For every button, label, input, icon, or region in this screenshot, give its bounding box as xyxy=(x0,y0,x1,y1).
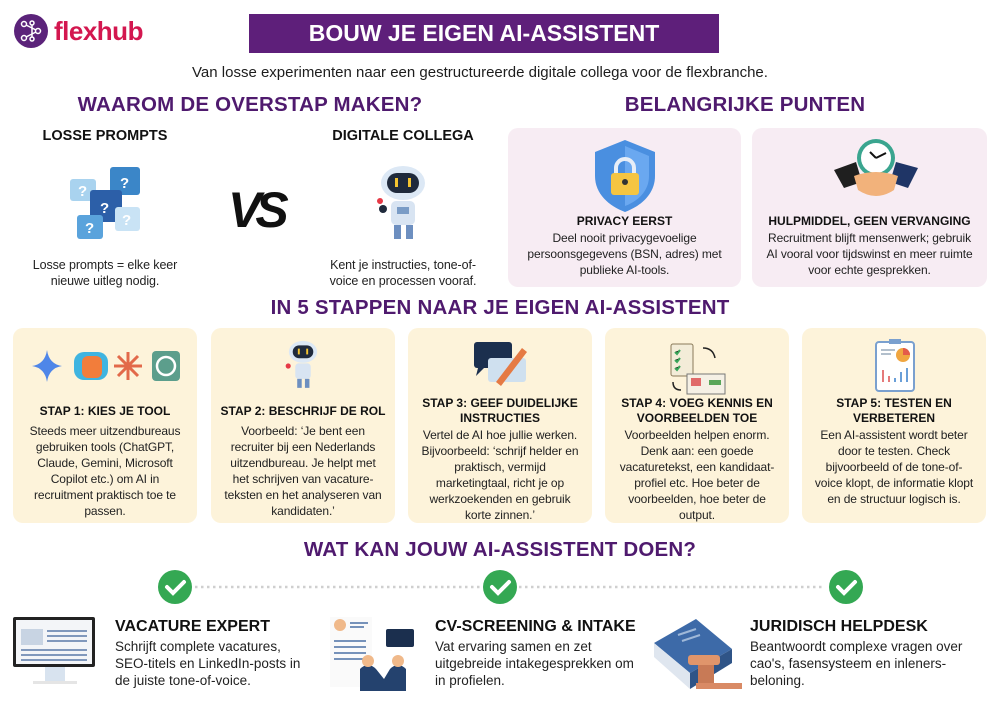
heading: 5 stappen: IN 5 STAPPEN NAAR JE EIGEN AI-ASSISTENT xyxy=(271,296,729,319)
item: juridisch helpdesk: JURIDISCH HELPDESK xyxy=(750,618,928,635)
panel: stap 2: STAP 2: BESCHRIJF DE ROL xyxy=(221,404,385,418)
panel: stap 3: Vertel de AI hoe jullie werken. Bijvoorbeeld: ‘schrijf helder en praktisch, vermijd marketingtaal, richt je op werkzoekenden en gebruik korte zinnen.’ xyxy=(422,428,578,522)
panel: stap 1: Steeds meer uitzendbureaus gebruiken tools (ChatGPT, Claude, Gemini, Microsoft Copilot etc.) om AI in recruitment praktisch toe te passen. xyxy=(30,424,180,518)
icon: question bubbles: ? xyxy=(78,183,87,200)
panel: hulpmiddel xyxy=(752,128,987,287)
panel: stap 2: Voorbeeld: ‘Je bent een recruiter bij een Nederlands uitzendbureau. Je helpt met het schrijven van vacature-teksten en het analyseren van kandidaten.’ xyxy=(224,424,382,518)
icon: robot xyxy=(286,341,318,388)
panel: stap 4 xyxy=(605,328,789,523)
panel: digitale collega: Kent je instructies, tone-of-voice en processen vooraf. xyxy=(330,258,476,288)
panel: stap 4: Voorbeelden helpen enorm. Denk aan: een goede vacaturetekst, een kandidaat-profiel etc. Hoe beter de voorbeelden, hoe beter de output. xyxy=(620,428,774,522)
subtitle: Van losse experimenten naar een gestructureerde digitale collega voor de flexbranche. xyxy=(192,64,768,81)
panel: hulpmiddel: HULPMIDDEL, GEEN VERVANGING xyxy=(768,214,971,228)
item: cv-screening xyxy=(334,618,636,691)
panel: digitale collega xyxy=(330,128,476,288)
item: vacature expert: Schrijft complete vacatures, SEO-titels en LinkedIn-posts in de juiste tone-of-voice. xyxy=(115,639,300,688)
icon: question bubbles: ? xyxy=(100,200,109,217)
item: cv-screening: Vat ervaring samen en zet uitgebreide intakegesprekken om in profielen. xyxy=(435,639,634,688)
icon: ai tool logos xyxy=(32,350,180,382)
panel: stap 5: Een AI-assistent wordt beter door te testen. Check bijvoorbeeld of de tone-of-voice klopt, de informatie klopt en de structuur logisch is. xyxy=(815,428,973,506)
item: juridisch helpdesk xyxy=(654,618,962,689)
icon: clipboard book xyxy=(670,344,726,394)
icon: clock handshake xyxy=(834,139,918,196)
heading: waarom: WAAROM DE OVERSTAP MAKEN? xyxy=(78,93,422,116)
icon: shield xyxy=(595,140,655,212)
panel: losse prompts xyxy=(33,128,178,288)
item: vacature expert: VACATURE EXPERT xyxy=(115,618,270,635)
icon: monitor xyxy=(13,617,95,684)
heading: belangrijke punten: BELANGRIJKE PUNTEN xyxy=(625,93,865,116)
icon: question bubbles: ? xyxy=(122,212,131,229)
panel: losse prompts: Losse prompts = elke keer nieuwe uitleg nodig. xyxy=(33,258,177,288)
title banner xyxy=(249,14,719,53)
title banner: BOUW JE EIGEN AI-ASSISTENT xyxy=(309,20,659,46)
panel: stap 2 xyxy=(211,328,395,523)
panel: stap 5 xyxy=(802,328,986,523)
panel: stap 1 xyxy=(13,328,197,523)
panel: privacy eerst: Deel nooit privacygevoelige persoonsgegevens (BSN, adres) met publieke AI-tools. xyxy=(527,231,722,277)
icon: question bubbles: ? xyxy=(85,220,94,237)
panel: privacy eerst: PRIVACY EERST xyxy=(577,214,672,228)
icon: question bubbles xyxy=(70,167,140,239)
panel: hulpmiddel: Recruitment blijft mensenwerk; gebruik AI vooral voor tijdswinst en meer ruimte voor echte gesprekken. xyxy=(766,231,973,277)
panel: stap 4: STAP 4: VOEG KENNIS EN VOORBEELDEN TOE xyxy=(621,396,773,424)
icon: law book gavel xyxy=(654,619,742,689)
panel: losse prompts: LOSSE PROMPTS xyxy=(43,128,167,144)
panel: stap 1: STAP 1: KIES JE TOOL xyxy=(40,404,170,418)
panel: digitale collega: DIGITALE COLLEGA xyxy=(332,128,474,144)
heading: wat kan: WAT KAN JOUW AI-ASSISTENT DOEN? xyxy=(304,538,696,561)
item: cv-screening: CV-SCREENING & INTAKE xyxy=(435,618,636,635)
logo: flexhub xyxy=(54,16,143,46)
logo xyxy=(14,14,143,48)
icon: handshake cv xyxy=(334,619,414,691)
icon: chat pencil xyxy=(474,342,527,386)
checks with dotted line xyxy=(158,570,863,604)
icon: VS: VS xyxy=(228,182,283,238)
item: vacature expert xyxy=(13,617,300,688)
icon: robot xyxy=(377,166,425,239)
panel: privacy eerst xyxy=(508,128,741,287)
icon: question bubbles: ? xyxy=(120,175,129,192)
panel: stap 3: STAP 3: GEEF DUIDELIJKE INSTRUCTIES xyxy=(422,396,578,424)
panel: stap 5: STAP 5: TESTEN EN VERBETEREN xyxy=(836,396,952,424)
icon: report clipboard xyxy=(875,339,915,392)
item: juridisch helpdesk: Beantwoordt complexe vragen over cao's, fasensysteem en inleners-beloning. xyxy=(750,639,962,688)
panel: stap 3 xyxy=(408,328,592,523)
